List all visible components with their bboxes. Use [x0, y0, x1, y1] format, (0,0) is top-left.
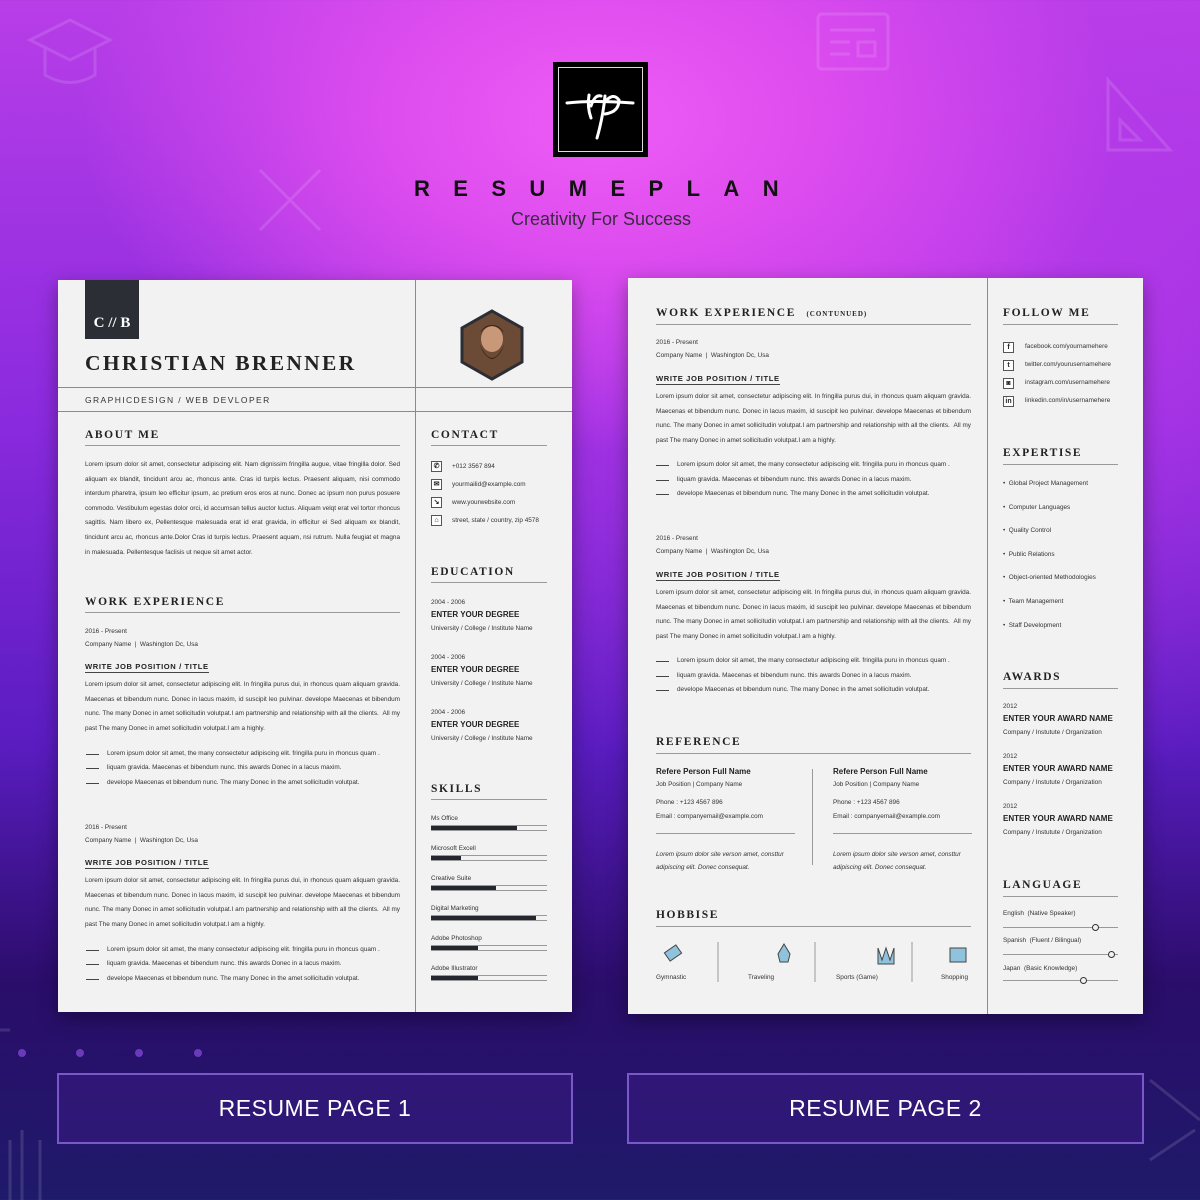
panel: resume page 2: linkedin.com/in/usernamehere [1025, 397, 1110, 404]
panel: resume page 2: Company / Instutute / Organization [1003, 729, 1102, 736]
panel: resume page 1: ENTER YOUR DEGREE [431, 720, 519, 729]
panel: resume page 1: Company Name | Washington Dc, Usa [85, 837, 198, 844]
panel: resume page 1: Lorem ipsum dolor sit amet, consectetur adipiscing elit. In fringilla purus dui, in rhoncus quam aliquam gravida. Maecenas et bibendum nunc. Donec in lacus maxim, id suscipit leo pulvinar. develope Maecenas et bibendum nunc. The many Donec in amet sollicitudin volutpat.I am partnership and relationship with all the clients. All my past The many Donec in amet sollicitudin volutpat.I am a highly. [85, 681, 400, 732]
expertise: EXPERTISE [1003, 447, 1082, 459]
panel: resume page 1: Digital Marketing [431, 905, 479, 912]
panel: resume page 1: WRITE JOB POSITION / TITLE [85, 858, 209, 867]
awards: AWARDS [1003, 671, 1061, 683]
panel: resume page 2: • Public Relations [1003, 551, 1055, 558]
panel: resume page 1: Lorem ipsum dolor sit amet, the many consectetur adipiscing elit. fringilla puru in rhoncus quam . [107, 750, 380, 757]
panel: resume page 2: Lorem ipsum dolor sit amet, the many consectetur adipiscing elit. fringilla puru in rhoncus quam . [677, 657, 950, 664]
panel: resume page 2: adipiscing elit. Donec consequat. [656, 864, 749, 871]
panel: resume page 1: University / College / Institute Name [431, 680, 533, 687]
photo [460, 309, 524, 381]
panel: resume page 2: f [1007, 344, 1010, 351]
panel: resume page 2: Email : companyemail@example.com [656, 813, 763, 820]
panel: resume page 1: Lorem ipsum dolor sit amet, consectetur adipiscing elit. Nam dignissim fringilla augue, vitae fringilla dolor. Sed aliquam ex blandit, tincidunt arcu ac, rhoncus ante. Cras id turpis lectus. Praesent aliquam, nisi commodo interdum pharetra, ipsum leo efficitur ipsum, ac pretium eros eros at nunc. Donec ac ipsum non purus posuere commodo. Vestibulum egestas dolor orci, id accumsan tellus auctor luctus. Aliquam velqt erat vel tortor rhoncus sagittis. Nam libero ex, Pellentesque malesuada erat id erat gravida, in efficitur ei Sed aliquam ex blandit, tincidunt arcu ac, rhoncus ante.Dolor Cras id turpis lectus. Praesent aquam, nsi rutrum. Nulla feugiat et magna in malesuada. Pellentesque faclisis ut neque sit amet actor. [85, 461, 400, 556]
follow me: FOLLOW ME [1003, 307, 1090, 319]
panel: resume page 2: • Staff Development [1003, 622, 1061, 629]
panel: resume page 2: 2012 [1003, 703, 1017, 710]
panel: resume page 1: www.yourwebsite.com [452, 499, 515, 506]
panel: resume page 2: ◙ [1006, 380, 1011, 387]
panel: resume page 2: Company Name | Washington Dc, Usa [656, 352, 769, 359]
button: resume page 2 [627, 1073, 1144, 1144]
hobbies: HOBBISE [656, 909, 719, 921]
contact: CONTACT [431, 429, 499, 441]
panel: resume page 2: • Global Project Management [1003, 480, 1088, 487]
button: resume page 1: RESUME PAGE 1 [219, 1095, 411, 1121]
monogram box [85, 280, 139, 339]
panel: resume page 2: English (Native Speaker) [1003, 910, 1075, 917]
panel: resume page 2: facebook.com/yournamehere [1025, 343, 1108, 350]
panel: resume page 2: Sports (Game) [836, 974, 878, 981]
panel: resume page 1: develope Maecenas et bibendum nunc. The many Donec in the amet sollicitudin volutpat. [107, 779, 359, 786]
panel: resume page 2: • Computer Languages [1003, 504, 1070, 511]
panel: resume page 1: ENTER YOUR DEGREE [431, 610, 519, 619]
panel: resume page 1: ✉ [434, 481, 439, 488]
panel: resume page 2: Phone : +123 4567 896 [833, 799, 900, 806]
panel: resume page 2: Company / Instutute / Organization [1003, 829, 1102, 836]
panel: resume page 2: Traveling [748, 974, 774, 981]
panel: resume page 1 [58, 280, 572, 1012]
language: LANGUAGE [1003, 879, 1082, 891]
panel: resume page 1: Microsoft Excell [431, 845, 476, 852]
panel: resume page 1: Company Name | Washington Dc, Usa [85, 641, 198, 648]
panel: resume page 1: Adobe Illustrator [431, 965, 478, 972]
panel: resume page 2: develope Maecenas et bibendum nunc. The many Donec in the amet sollicitudin volutpat. [677, 490, 929, 497]
reference: REFERENCE [656, 736, 741, 748]
panel: resume page 1: ENTER YOUR DEGREE [431, 665, 519, 674]
panel: resume page 2: 2012 [1003, 803, 1017, 810]
panel: resume page 2: liquam gravida. Maecenas et bibendum nunc. this awards Donec in a lacus maxim. [677, 476, 911, 483]
panel: resume page 1: develope Maecenas et bibendum nunc. The many Donec in the amet sollicitudin volutpat. [107, 975, 359, 982]
panel: resume page 2: adipiscing elit. Donec consequat. [833, 864, 926, 871]
button: resume page 2: RESUME PAGE 2 [789, 1095, 982, 1121]
panel: resume page 2: instagram.com/usernamehere [1025, 379, 1110, 386]
tagline: Creativity For Success [511, 209, 691, 229]
panel: resume page 2: • Team Management [1003, 598, 1063, 605]
panel: resume page 1: yourmailid@example.com [452, 481, 526, 488]
panel: resume page 1: liquam gravida. Maecenas et bibendum nunc. this awards Donec in a lacus maxim. [107, 764, 341, 771]
panel: resume page 2: Email : companyemail@example.com [833, 813, 940, 820]
about me: ABOUT ME [85, 429, 160, 441]
panel: resume page 2: WRITE JOB POSITION / TITLE [656, 570, 780, 579]
panel: resume page 2: Lorem ipsum dolor site verson amet, consttur [833, 851, 961, 858]
panel: resume page 1: Lorem ipsum dolor sit amet, consectetur adipiscing elit. In fringilla purus dui, in rhoncus quam aliquam gravida. Maecenas et bibendum nunc. Donec in lacus maxim, id suscipit leo pulvinar. develope Maecenas et bibendum nunc. The many Donec in amet sollicitudin volutpat.I am partnership and relationship with all the clients. All my past The many Donec in amet sollicitudin volutpat.I am a highly. [85, 877, 400, 928]
panel: resume page 2: Gymnastic [656, 974, 686, 981]
panel: resume page 1: +012 3567 894 [452, 463, 495, 470]
panel: resume page 2: Job Position | Company Name [833, 781, 919, 788]
work experience: WORK EXPERIENCE [85, 596, 225, 608]
panel: resume page 2: in [1005, 398, 1012, 405]
panel: resume page 2: twitter.com/yourusernamehere [1025, 361, 1111, 368]
panel: resume page 2: Phone : +123 4567 896 [656, 799, 723, 806]
panel: resume page 2: Job Position | Company Name [656, 781, 742, 788]
panel: resume page 2: Refere Person Full Name [656, 767, 751, 776]
panel: resume page 2: ENTER YOUR AWARD NAME [1003, 764, 1113, 773]
panel: resume page 1: University / College / Institute Name [431, 625, 533, 632]
panel: resume page 1: street, state / country, zip 4578 [452, 517, 539, 524]
education: EDUCATION [431, 566, 515, 578]
skills: SKILLS [431, 783, 482, 795]
panel: resume page 2: • Object-oriented Methodologies [1003, 574, 1096, 581]
panel: resume page 1: 2016 - Present [85, 628, 127, 635]
brand name: RESUMEPLAN [414, 176, 802, 201]
panel: resume page 2: Lorem ipsum dolor sit amet, consectetur adipiscing elit. In fringilla purus dui, in rhoncus quam aliquam gravida. Maecenas et bibendum nunc. Donec in lacus maxim, id suscipit leo pulvinar. develope Maecenas et bibendum nunc. The many Donec in amet sollicitudin volutpat.I am partnership and relationship with all the clients. All my past The many Donec in amet sollicitudin volutpat.I am a highly. [656, 589, 971, 640]
panel: resume page 1: 2016 - Present [85, 824, 127, 831]
subtitle: GRAPHICDESIGN / WEB DEVLOPER [85, 395, 271, 405]
name: CHRISTIAN BRENNER [85, 351, 356, 375]
panel: resume page 1: Lorem ipsum dolor sit amet, the many consectetur adipiscing elit. fringilla puru in rhoncus quam . [107, 946, 380, 953]
panel: resume page 1: ⌂ [434, 517, 439, 524]
panel: resume page 2: liquam gravida. Maecenas et bibendum nunc. this awards Donec in a lacus maxim. [677, 672, 911, 679]
panel: resume page 2: Lorem ipsum dolor site verson amet, consttur [656, 851, 784, 858]
panel: resume page 2: 2016 - Present [656, 339, 698, 346]
panel: resume page 2: t [1007, 362, 1010, 369]
panel: resume page 1: 2004 - 2006 [431, 709, 465, 716]
panel: resume page 2: Shopping [941, 974, 968, 981]
panel: resume page 2: Company / Instutute / Organization [1003, 779, 1102, 786]
panel: resume page 1: 2004 - 2006 [431, 654, 465, 661]
decorative dots [18, 1049, 202, 1057]
panel: resume page 2: Japan (Basic Knowledge) [1003, 965, 1077, 972]
panel: resume page 2: • Quality Control [1003, 527, 1051, 534]
monogram box: C // B [94, 315, 130, 331]
panel: resume page 2: ENTER YOUR AWARD NAME [1003, 814, 1113, 823]
panel: resume page 1: Ms Office [431, 815, 458, 822]
panel: resume page 2: Lorem ipsum dolor sit amet, consectetur adipiscing elit. In fringilla purus dui, in rhoncus quam aliquam gravida. Maecenas et bibendum nunc. Donec in lacus maxim, id suscipit leo pulvinar. develope Maecenas et bibendum nunc. The many Donec in amet sollicitudin volutpat.I am partnership and relationship with all the clients. All my past The many Donec in amet sollicitudin volutpat.I am a highly. [656, 393, 971, 444]
logo [553, 62, 648, 157]
panel: resume page 1: WRITE JOB POSITION / TITLE [85, 662, 209, 671]
panel: resume page 2 [628, 278, 1143, 1014]
panel: resume page 2: 2016 - Present [656, 535, 698, 542]
panel: resume page 1: University / College / Institute Name [431, 735, 533, 742]
button: resume page 1 [57, 1073, 573, 1144]
panel: resume page 2: Lorem ipsum dolor sit amet, the many consectetur adipiscing elit. fringilla puru in rhoncus quam . [677, 461, 950, 468]
panel: resume page 2: Spanish (Fluent / Bilingual) [1003, 937, 1081, 944]
panel: resume page 1: Adobe Photoshop [431, 935, 482, 942]
panel: resume page 1: Creative Suite [431, 875, 471, 882]
panel: resume page 2: Refere Person Full Name [833, 767, 928, 776]
panel: resume page 2: 2012 [1003, 753, 1017, 760]
work experience continued: WORK EXPERIENCE (CONTUNUED) [656, 307, 867, 319]
panel: resume page 2: WRITE JOB POSITION / TITLE [656, 374, 780, 383]
panel: resume page 1: 2004 - 2006 [431, 599, 465, 606]
panel: resume page 1: ↘ [434, 499, 439, 506]
panel: resume page 1: ✆ [434, 463, 439, 470]
panel: resume page 2: develope Maecenas et bibendum nunc. The many Donec in the amet sollicitudin volutpat. [677, 686, 929, 693]
panel: resume page 1: liquam gravida. Maecenas et bibendum nunc. this awards Donec in a lacus maxim. [107, 960, 341, 967]
panel: resume page 2: ENTER YOUR AWARD NAME [1003, 714, 1113, 723]
panel: resume page 2: Company Name | Washington Dc, Usa [656, 548, 769, 555]
